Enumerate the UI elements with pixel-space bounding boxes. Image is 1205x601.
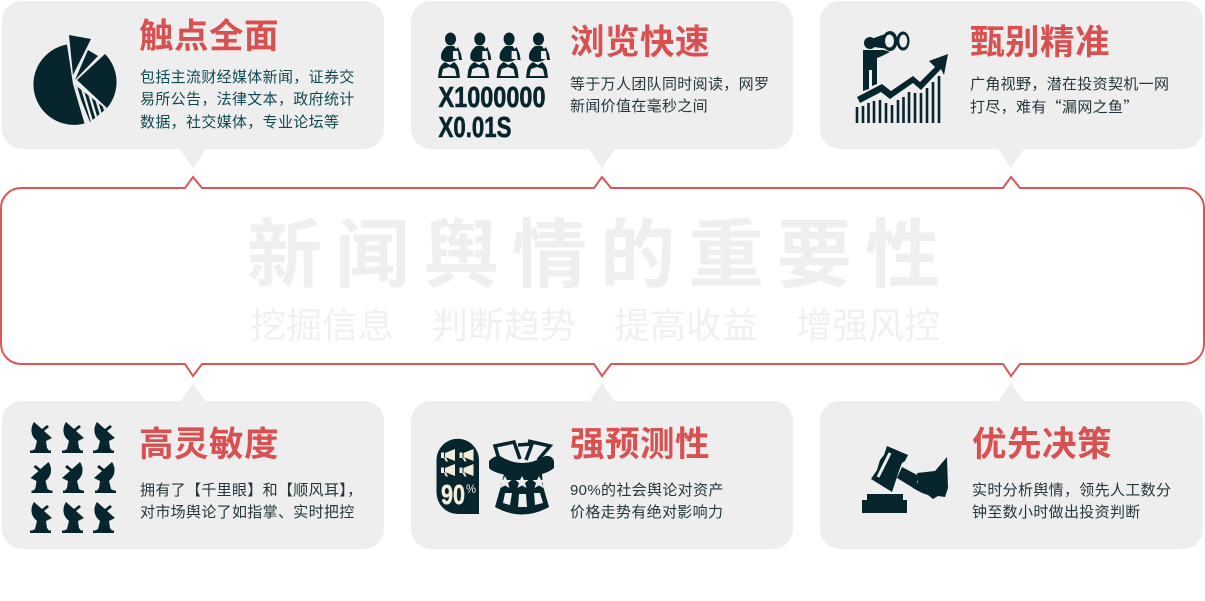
description: 广角视野，潜在投资契机一网 [970,76,1169,92]
icon: gavel [862,446,948,513]
subtitle keywords: 判断趋势 [432,305,576,346]
icon: 90 percent badge and hat: % [466,482,476,496]
description: 90%的社会舆论对资产 [570,482,724,499]
subtitle keywords: 挖掘信息 [250,305,394,346]
icon: readers with multipliers: X1000000 [438,82,546,114]
icon: satellite dishes [30,422,116,533]
description [970,76,1169,117]
description: 价格走势有绝对影响力 [570,504,723,521]
icon: readers with multipliers [438,32,550,144]
heading: 优先决策 [972,426,1112,464]
description: 新闻价值在毫秒之间 [570,98,708,115]
description: 实时分析舆情，领先人工数分 [972,482,1171,499]
main title: 新闻舆情的重要性 [247,213,953,297]
subtitle keywords: 提高收益 [614,305,758,346]
panel: 浏览快速 [411,1,793,168]
heading: 浏览快速 [570,24,710,62]
icon: pie chart [33,35,117,125]
description: 打尽，难有“漏网之鱼” [970,96,1139,117]
icon: 90 percent badge and hat [436,438,554,514]
subtitle keywords [250,305,940,346]
panel: 甄别精准 [820,1,1203,168]
icon: binoculars over rising chart [856,31,948,123]
description: 等于万人团队同时阅读，网罗 [570,76,769,92]
description [972,482,1171,521]
panel: 强预测性 [411,384,793,549]
description [570,482,724,521]
description [140,69,355,131]
heading: 触点全面 [139,18,279,56]
icon: 90 percent badge and hat: 90 [441,479,465,510]
panel: 触点全面 [2,1,384,168]
description: 钟至数小时做出投资判断 [972,504,1141,521]
description: 数据，社交媒体，专业论坛等 [140,114,339,131]
description: 拥有了【千里眼】和【顺风耳】， [140,482,362,499]
description [140,482,362,521]
subtitle keywords: 增强风控 [796,305,940,346]
description [570,76,769,115]
heading: 甄别精准 [970,24,1110,62]
description: 包括主流财经媒体新闻，证券交 [140,69,355,86]
heading: 高灵敏度 [139,426,279,464]
icon: readers with multipliers: X0.01S [438,112,512,144]
description: 易所公告，法律文本，政府统计 [140,91,355,108]
heading: 强预测性 [570,426,710,464]
description: 对市场舆论了如指掌、实时把控 [140,504,355,521]
panel: 优先决策 [820,384,1203,549]
panel: 高灵敏度 [2,384,384,549]
